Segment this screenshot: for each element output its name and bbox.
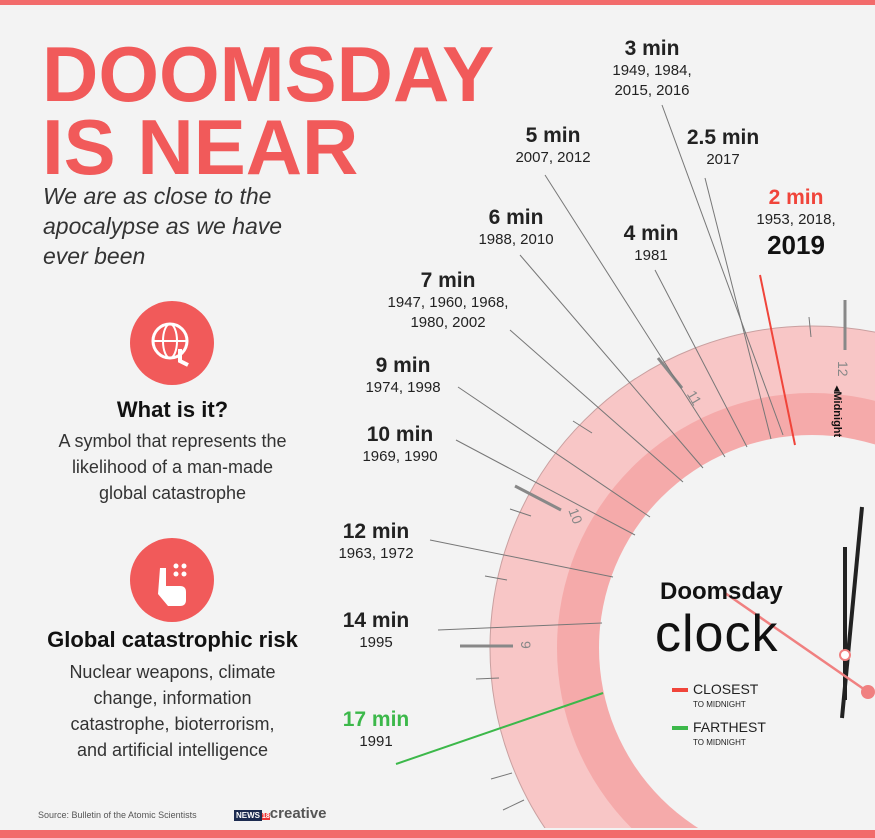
text: 1995: [359, 634, 393, 651]
text: 1988, 2010: [478, 231, 554, 248]
hour marks: [460, 300, 845, 646]
title: DOOMSDAY: [42, 30, 494, 118]
heading: what is it: What is it?: [117, 397, 228, 422]
text: what is it: [58, 431, 287, 503]
labels: [612, 37, 692, 99]
label lines: [430, 105, 783, 630]
text: 9 min: [376, 354, 430, 377]
text: what is it: A symbol that represents the: [58, 431, 287, 451]
text: 2007, 2012: [515, 149, 591, 166]
text: 5 min: [526, 124, 580, 147]
text: 7 min: [421, 269, 475, 292]
text: 1969, 1990: [362, 448, 438, 465]
subtitle: ever been: [43, 243, 145, 269]
legend: [672, 681, 766, 747]
text: 2019: [767, 230, 825, 260]
legend: FARTHEST: [693, 719, 766, 735]
subtitle: We are as close to the: [43, 183, 271, 209]
text: 1947, 1960, 1968,: [388, 294, 508, 311]
heading: risk: Global catastrophic risk: [47, 627, 298, 652]
bottom bar: [0, 830, 875, 838]
legend: TO MIDNIGHT: [693, 700, 746, 709]
text: 1980, 2002: [410, 314, 486, 331]
source: Source: Bulletin of the Atomic Scientists: [38, 810, 197, 820]
text: 6 min: [489, 206, 543, 229]
clock graphic: 10: [565, 506, 586, 526]
text: 1981: [634, 247, 668, 264]
clock graphic: [396, 104, 875, 828]
text: clock: [655, 605, 778, 663]
clock title: Doomsday: [660, 578, 783, 605]
text: 1953, 2018,: [756, 211, 836, 228]
text: 12 min: [343, 520, 409, 543]
legend: CLOSEST: [693, 681, 758, 697]
legend: TO MIDNIGHT: [693, 738, 746, 747]
title: IS NEAR: [42, 103, 358, 191]
text: 2017: [706, 151, 740, 168]
text: what is it: global catastrophe: [99, 483, 246, 503]
text: risk: and artificial intelligence: [77, 740, 268, 760]
clock graphic: 9: [518, 641, 534, 649]
subtitle: [43, 183, 282, 269]
text: 2.5 min: [687, 126, 759, 149]
icon: touch: [130, 538, 214, 622]
text: risk: [69, 662, 276, 760]
text: 2 min: [769, 186, 823, 209]
text: risk: change, information: [93, 688, 252, 708]
logo: NEWS 18creative: [236, 805, 327, 822]
labels: 3 min: [625, 37, 679, 60]
text: 1963, 1972: [338, 545, 414, 562]
text: risk: Nuclear weapons, climate: [69, 662, 276, 682]
labels: 2015, 2016: [614, 82, 690, 99]
clock graphic: 12: [835, 361, 851, 377]
icon: globe: [130, 301, 214, 385]
hands: [725, 507, 875, 718]
top bar: [0, 0, 875, 5]
labels: 1949, 1984,: [612, 62, 692, 79]
text: 14 min: [343, 609, 409, 632]
subtitle: apocalypse as we have: [43, 213, 282, 239]
text: 1974, 1998: [365, 379, 441, 396]
text: 1991: [359, 733, 393, 750]
text: 4 min: [624, 222, 678, 245]
text: 17 min: [343, 708, 409, 731]
text: 10 min: [367, 423, 433, 446]
text: what is it: likelihood of a man-made: [72, 457, 273, 477]
title: [42, 30, 494, 191]
text: risk: catastrophe, bioterrorism,: [70, 714, 275, 734]
midnight label: ◂Midnight: [831, 386, 843, 437]
clock graphic: 11: [684, 387, 705, 408]
